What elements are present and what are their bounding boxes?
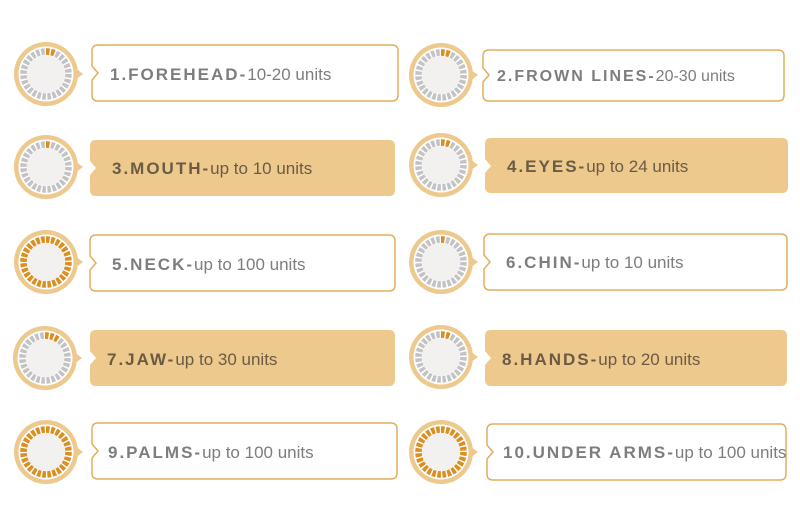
label 2: 2.FROWN LINES-20-30 units [497,68,735,85]
item 9: palms [14,420,397,484]
box 8 [485,330,787,386]
box 4 [485,138,788,193]
box 7 [90,330,395,386]
icon: dial 2 [409,43,478,107]
item 2: frown lines [409,43,784,107]
item 1: forehead [14,42,398,106]
box 5 [90,235,395,291]
box 10 [487,424,786,480]
icon: dial 3 [14,135,83,199]
label 9: 9.PALMS-up to 100 units [108,443,314,462]
icon: dial 1 [14,42,83,106]
box 2 [483,50,784,101]
icon: dial 7 [13,326,82,390]
icon: dial 5 [14,230,83,294]
item 10: under arms [409,420,786,484]
label 1: 1.FOREHEAD-10-20 units [110,65,331,84]
item 7: jaw [13,326,395,390]
item 4: eyes [409,133,788,197]
item 5: neck [14,230,395,294]
icon: dial 6 [409,230,478,294]
icon: dial 9 [14,420,83,484]
icon: dial 4 [409,133,478,197]
box 6 [484,234,787,290]
label 5: 5.NECK-up to 100 units [112,255,306,274]
label 3: 3.MOUTH-up to 10 units [112,159,312,178]
icon: dial 8 [409,325,478,389]
icon: dial 10 [409,420,478,484]
item 3: mouth [14,135,395,199]
item 6: chin [409,230,787,294]
box 1 [92,45,398,101]
label 7: 7.JAW-up to 30 units [107,350,277,369]
item 8: hands [409,325,787,389]
label 8: 8.HANDS-up to 20 units [502,350,700,369]
label 6: 6.CHIN-up to 10 units [506,253,683,272]
label 4: 4.EYES-up to 24 units [507,157,688,176]
box 9 [92,423,397,479]
box 3 [90,140,395,196]
label 10: 10.UNDER ARMS-up to 100 units [503,443,786,462]
